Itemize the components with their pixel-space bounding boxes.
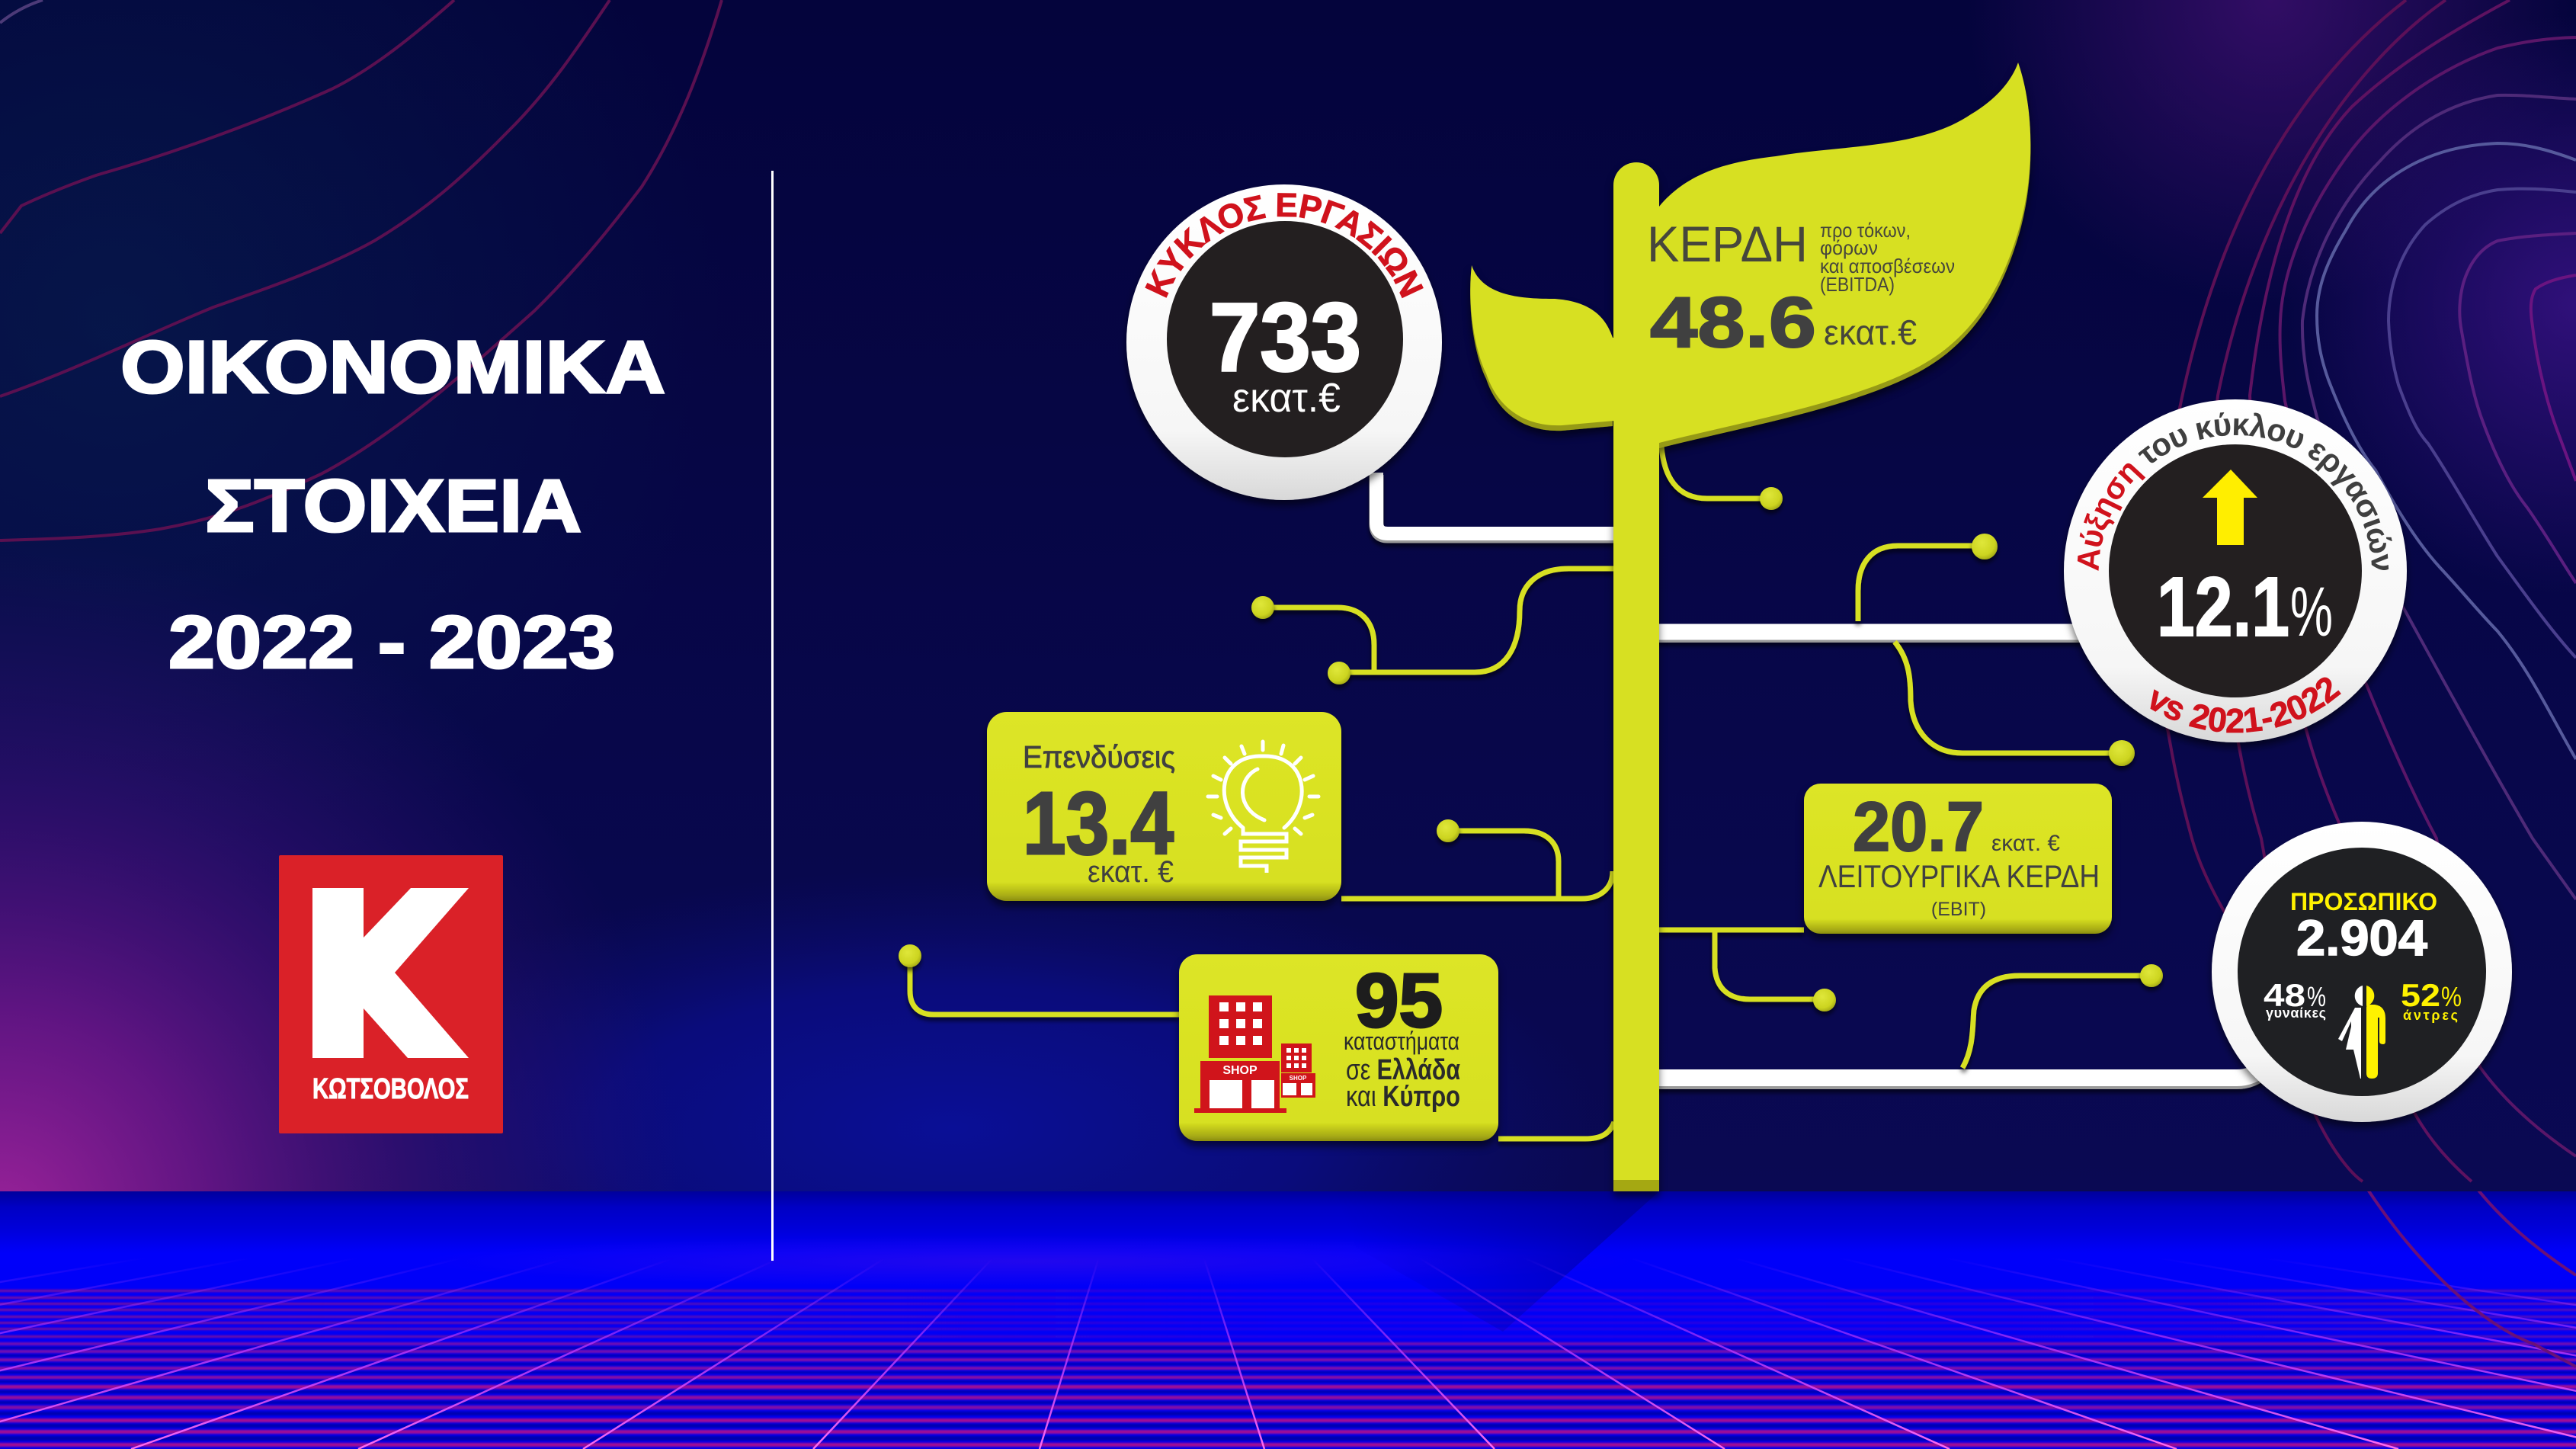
badge: turnover: ΚΥΚΛΟΣ ΕΡΓΑΣΙΩΝ	[1145, 193, 1424, 299]
badge: personnel: 48	[2264, 977, 2305, 1013]
badge: turnover: εκατ.€	[1232, 375, 1341, 421]
icon: light bulb	[1208, 742, 1318, 873]
EBITDA leaf text: (EBITDA)	[1820, 273, 1895, 296]
panel: EBIT	[1804, 784, 2112, 934]
EBITDA leaf text: 48.6	[1650, 282, 1816, 362]
floor grid	[0, 1191, 2576, 1449]
icon: up arrow	[2203, 470, 2257, 545]
badge: growth	[2061, 399, 2410, 752]
stem	[1613, 162, 1659, 1191]
badge: growth: Αύξηση του κύκλου εργασιών	[2078, 412, 2392, 571]
panel: stores: σε Ελλάδα	[1346, 1054, 1460, 1086]
panel: investments: 13.4	[1023, 774, 1174, 873]
EBITDA leaf text: φόρων	[1820, 236, 1878, 259]
panel: investments: εκατ. €	[1088, 855, 1174, 889]
panel: EBIT: ΛΕΙΤΟΥΡΓΙΚΑ ΚΕΡΔΗ	[1818, 858, 2100, 894]
badge: turnover	[1123, 184, 1445, 508]
badge: growth: %	[2290, 573, 2333, 651]
plant: stem and leaves	[1470, 63, 2030, 1191]
floor stripes upper	[0, 1290, 2576, 1338]
logo: Kotsovolos: ΚΩΤΣΟΒΟΛΟΣ	[312, 1073, 469, 1105]
EBITDA leaf text: και αποσβέσεων	[1820, 255, 1955, 277]
divider	[771, 171, 774, 1261]
big leaf	[1659, 63, 2030, 443]
badge: personnel: γυναίκες	[2266, 1005, 2326, 1021]
icon: shop buildings: SHOP	[1222, 1064, 1258, 1077]
floor perspective lines	[0, 1263, 2576, 1449]
title	[120, 325, 665, 684]
title: ΣΤΟΙΧΕΙΑ	[205, 464, 582, 547]
floor base	[0, 1191, 2576, 1449]
icon: shop buildings	[1194, 995, 1315, 1113]
EBITDA leaf text	[1647, 216, 1955, 362]
EBITDA leaf text: προ τόκων,	[1820, 219, 1911, 242]
panel: EBIT: (EBIT)	[1931, 899, 1986, 920]
white connector: personnel	[1654, 1067, 2264, 1080]
leaf bevels	[1470, 68, 2030, 448]
contour lines right	[2157, 0, 2576, 1181]
badge: personnel: %	[2441, 981, 2462, 1012]
badge: personnel: 52	[2401, 977, 2440, 1013]
floor stripes lower	[0, 1342, 2576, 1447]
stem shadow	[1390, 1191, 1658, 1332]
badge: growth: 12.1	[2157, 560, 2289, 654]
badge: personnel: ΠΡΟΣΩΠΙΚΟ	[2290, 888, 2437, 915]
white connector: turnover	[1376, 473, 1616, 536]
EBITDA leaf text: ΚΕΡΔΗ	[1647, 216, 1808, 272]
panel: stores: και Κύπρο	[1346, 1081, 1460, 1113]
icon: woman and man figure	[2338, 986, 2385, 1079]
panel: EBIT: 20.7	[1853, 788, 1984, 866]
title: ΟΙΚΟΝΟΜΙΚΑ	[120, 325, 665, 409]
badge: growth: vs 2021-2022	[2151, 677, 2341, 733]
yellow branches	[910, 446, 2151, 1139]
badge: personnel: άντρες	[2403, 1008, 2458, 1023]
floor dark bands	[0, 1347, 2576, 1441]
panel: stores: 95	[1355, 958, 1443, 1043]
branch end dots	[899, 487, 2163, 1011]
badge: personnel: 2.904	[2296, 909, 2427, 966]
title: 2022 - 2023	[168, 601, 615, 684]
badge: personnel: %	[2307, 981, 2326, 1012]
logo: Kotsovolos	[279, 855, 503, 1133]
badge: turnover: 733	[1210, 283, 1361, 391]
panel: investments: Επενδύσεις	[1023, 739, 1175, 774]
EBITDA leaf text: εκατ.€	[1824, 313, 1917, 352]
white connector: growth	[1654, 632, 2081, 634]
panel: investments	[987, 712, 1341, 901]
panel: stores: καταστήματα	[1344, 1027, 1459, 1055]
badge: personnel	[2212, 822, 2512, 1122]
contour lines top-left	[0, 0, 722, 540]
panel: stores	[1179, 954, 1498, 1141]
contour lines over floor	[2363, 1181, 2576, 1367]
small leaf	[1470, 265, 1614, 425]
panel: EBIT: εκατ. €	[1991, 831, 2060, 856]
icon: shop buildings: SHOP	[1290, 1075, 1307, 1082]
